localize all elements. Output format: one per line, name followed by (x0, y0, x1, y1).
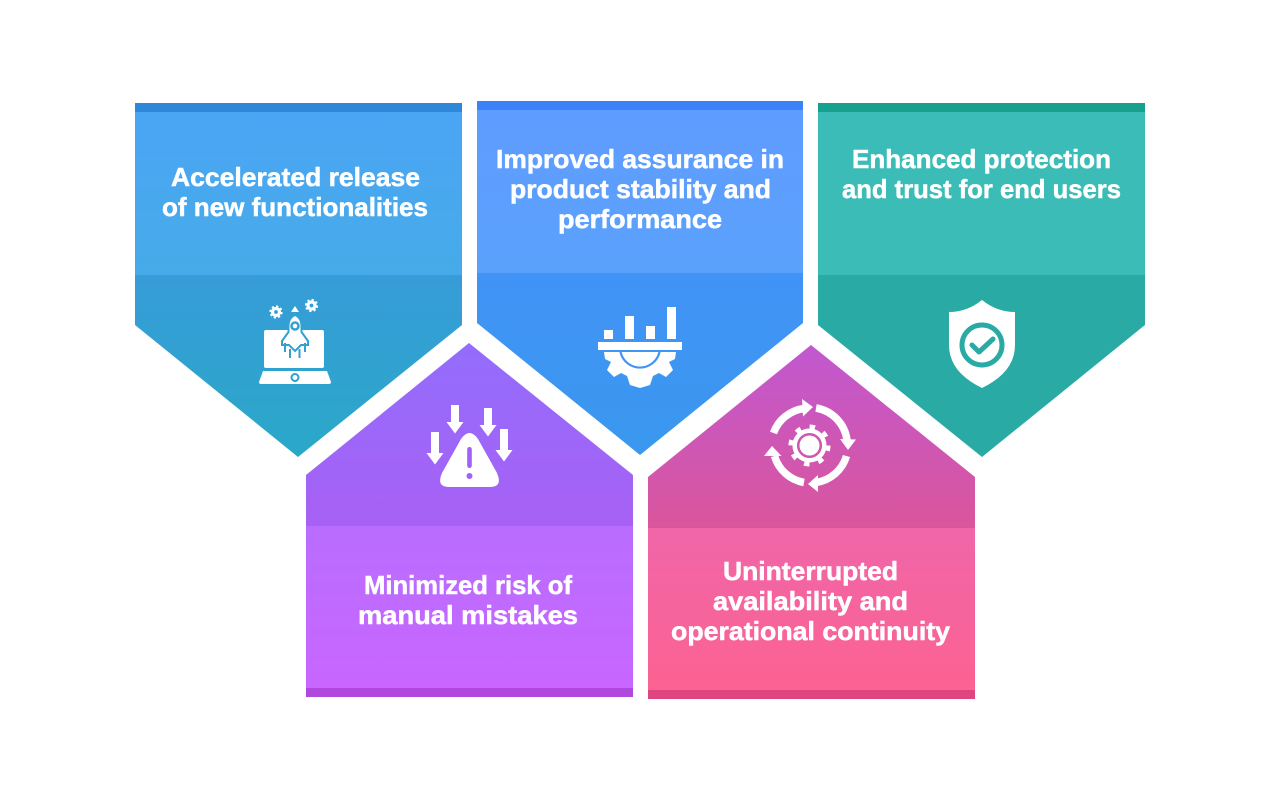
icon: shield with check (949, 300, 1015, 388)
icon: cycle with gear (764, 399, 856, 492)
heading: uninterrupted availability: Uninterrupted (723, 556, 898, 586)
heading: improved assurance (496, 144, 784, 234)
panel: improved assurance (477, 101, 803, 455)
heading: enhanced protection: and trust for end users (842, 174, 1121, 204)
heading: enhanced protection: Enhanced protection (852, 144, 1111, 174)
heading: accelerated release: of new functionalities (162, 192, 428, 222)
panel: accelerated release (135, 103, 462, 457)
heading: accelerated release: Accelerated release (171, 162, 420, 192)
panel: enhanced protection (818, 103, 1145, 457)
panel: minimized risk (306, 343, 633, 697)
heading: improved assurance: Improved assurance in (496, 144, 784, 174)
heading: uninterrupted availability (671, 556, 951, 646)
icon: warning with arrows (426, 405, 512, 487)
heading: enhanced protection (842, 144, 1121, 204)
heading: uninterrupted availability: operational continuity (671, 616, 951, 646)
heading: uninterrupted availability: availability and (713, 586, 908, 616)
heading: minimized risk: manual mistakes (358, 600, 578, 630)
icon: rocket and laptop (259, 300, 331, 384)
heading: minimized risk: Minimized risk of (364, 570, 572, 600)
heading: minimized risk (358, 570, 578, 630)
heading: accelerated release (162, 162, 428, 222)
heading: improved assurance: performance (558, 204, 722, 234)
icon: chart on gear (598, 307, 682, 388)
heading: improved assurance: product stability and (510, 174, 771, 204)
panel: uninterrupted availability (648, 345, 975, 699)
